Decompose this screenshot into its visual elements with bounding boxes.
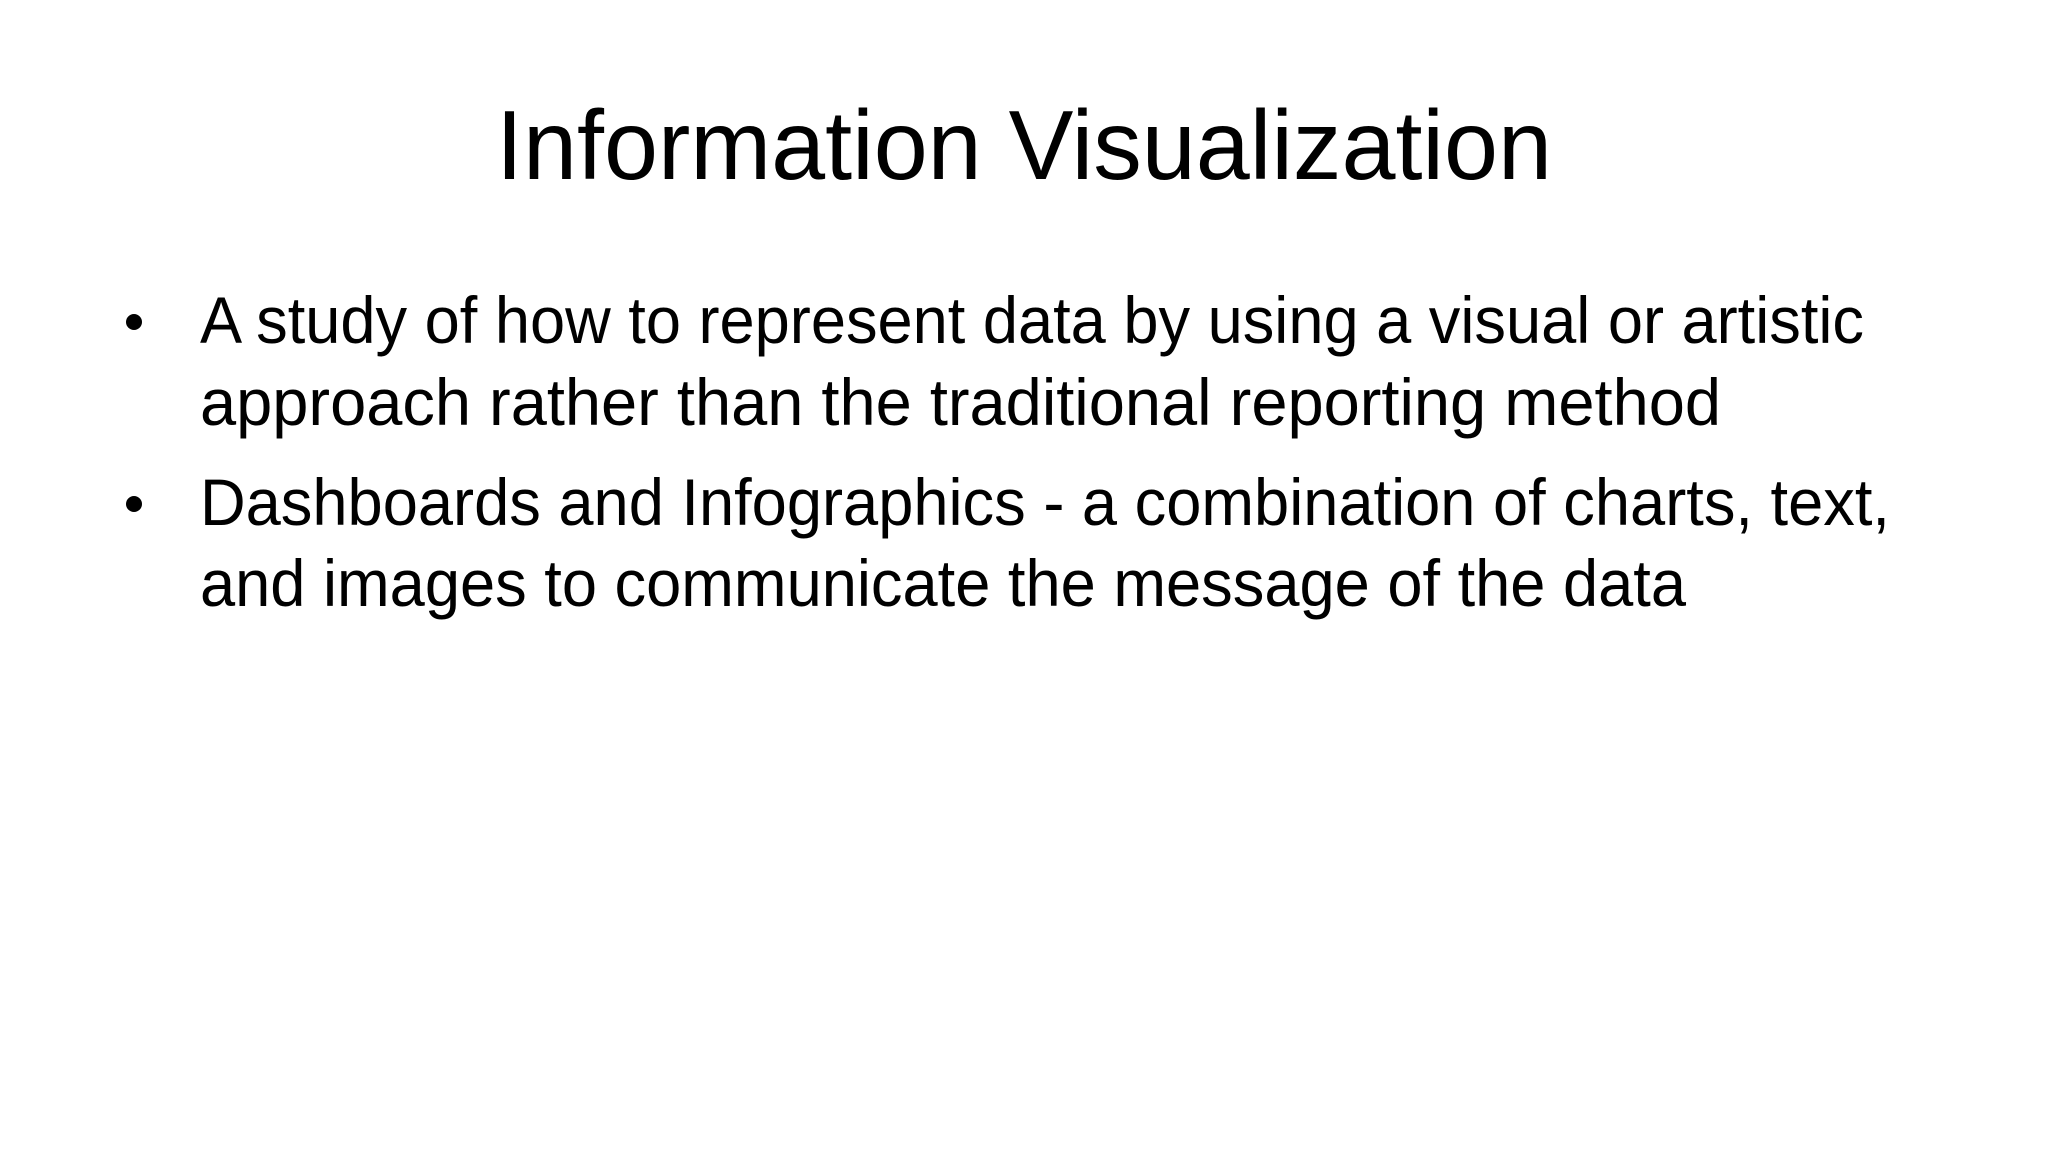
bullet 2: Dashboards and Infographics - a combination of charts, text, bbox=[200, 465, 1890, 539]
bullet 1 bbox=[126, 283, 1864, 439]
bullet 1: A study of how to represent data by using a visual or artistic bbox=[200, 283, 1864, 357]
bullet 2 bbox=[126, 465, 1890, 620]
bullet list bbox=[126, 283, 1890, 620]
bullet 2: and images to communicate the message of the data bbox=[200, 546, 1686, 620]
bullet 1: approach rather than the traditional reporting method bbox=[200, 365, 1721, 439]
title: Information Visualization bbox=[496, 90, 1552, 200]
